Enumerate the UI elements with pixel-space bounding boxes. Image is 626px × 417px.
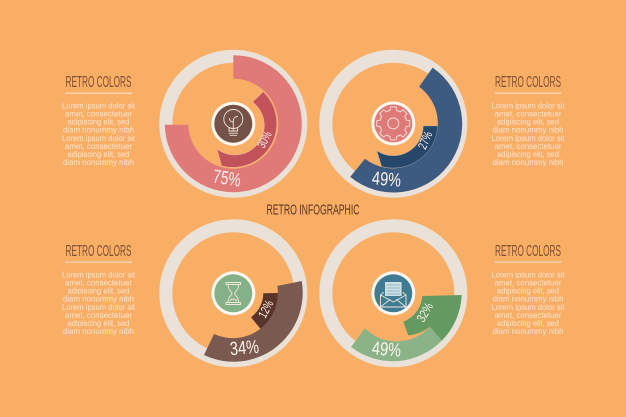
body text: adipiscing elit, sed bbox=[68, 150, 130, 159]
body text bbox=[492, 270, 565, 336]
value 32%: 32% bbox=[414, 300, 436, 325]
body text: diam nonummy nibh bbox=[63, 327, 134, 336]
body text: Lorem ipsum dolor sit bbox=[62, 303, 136, 312]
value 12%: 12% bbox=[256, 298, 276, 320]
body text: diam nonummy nibh bbox=[492, 158, 564, 167]
value 27%: 27% bbox=[415, 129, 435, 151]
body text: diam nonummy nibh bbox=[492, 126, 564, 135]
body text: diam nonummy nibh bbox=[492, 327, 564, 336]
title: RETRO INFOGRAPHIC bbox=[266, 202, 360, 218]
heading: RETRO COLORS bbox=[495, 243, 561, 260]
panel: bottom left text bbox=[62, 243, 136, 336]
body text: adipiscing elit, sed bbox=[68, 118, 130, 127]
body text: diam nonummy nibh bbox=[63, 158, 134, 167]
chart: brown radial 34% and 12% bbox=[166, 226, 303, 362]
body text: adipiscing elit, sed bbox=[497, 150, 559, 159]
body text: Lorem ipsum dolor sit bbox=[62, 134, 136, 143]
value 49%: 49% bbox=[371, 168, 402, 192]
body text: Lorem ipsum dolor sit bbox=[62, 101, 136, 110]
panel: bottom right text bbox=[492, 243, 565, 336]
heading: RETRO COLORS bbox=[66, 74, 132, 91]
body text: amet, consectetuer bbox=[494, 110, 562, 118]
body text: amet, consectetuer bbox=[494, 142, 562, 151]
value 30%: 30% bbox=[254, 129, 275, 150]
panel: top right text bbox=[492, 74, 565, 167]
body text: amet, consectetuer bbox=[65, 311, 132, 320]
body text: amet, consectetuer bbox=[65, 278, 132, 288]
body text: amet, consectetuer bbox=[65, 110, 132, 118]
body text: adipiscing elit, sed bbox=[68, 287, 130, 296]
body text: diam nonummy nibh bbox=[63, 295, 134, 304]
value 75%: 75% bbox=[211, 167, 242, 192]
body text bbox=[62, 270, 136, 336]
icon: envelope bbox=[371, 271, 415, 315]
body text: Lorem ipsum dolor sit bbox=[492, 134, 565, 143]
body text: diam nonummy nibh bbox=[63, 126, 134, 135]
body text: diam nonummy nibh bbox=[492, 295, 564, 304]
body text: amet, consectetuer bbox=[494, 311, 562, 320]
body text: Lorem ipsum dolor sit bbox=[492, 303, 565, 312]
icon: light bulb bbox=[211, 102, 255, 146]
chart: green radial 49% and 32% bbox=[326, 226, 462, 362]
body text bbox=[62, 101, 136, 167]
body text: Lorem ipsum dolor sit bbox=[492, 101, 565, 110]
heading: RETRO COLORS bbox=[495, 74, 561, 91]
value 49%: 49% bbox=[371, 338, 402, 362]
body text: adipiscing elit, sed bbox=[68, 319, 130, 328]
body text: adipiscing elit, sed bbox=[497, 287, 559, 296]
icon: hourglass bbox=[211, 271, 255, 315]
body text: adipiscing elit, sed bbox=[497, 319, 559, 328]
icon: gear bbox=[371, 101, 415, 145]
chart: navy radial 49% and 27% bbox=[326, 56, 462, 192]
body text: Lorem ipsum dolor sit bbox=[492, 270, 565, 279]
chart: pink radial 75% and 30% bbox=[165, 55, 302, 192]
body text bbox=[492, 101, 565, 167]
body text: Lorem ipsum dolor sit bbox=[62, 270, 136, 279]
panel: top left text bbox=[62, 74, 136, 167]
body text: adipiscing elit, sed bbox=[497, 118, 559, 127]
body text: amet, consectetuer bbox=[65, 142, 132, 151]
value 34%: 34% bbox=[229, 337, 260, 360]
body text: amet, consectetuer bbox=[494, 278, 562, 288]
heading: RETRO COLORS bbox=[66, 243, 132, 260]
